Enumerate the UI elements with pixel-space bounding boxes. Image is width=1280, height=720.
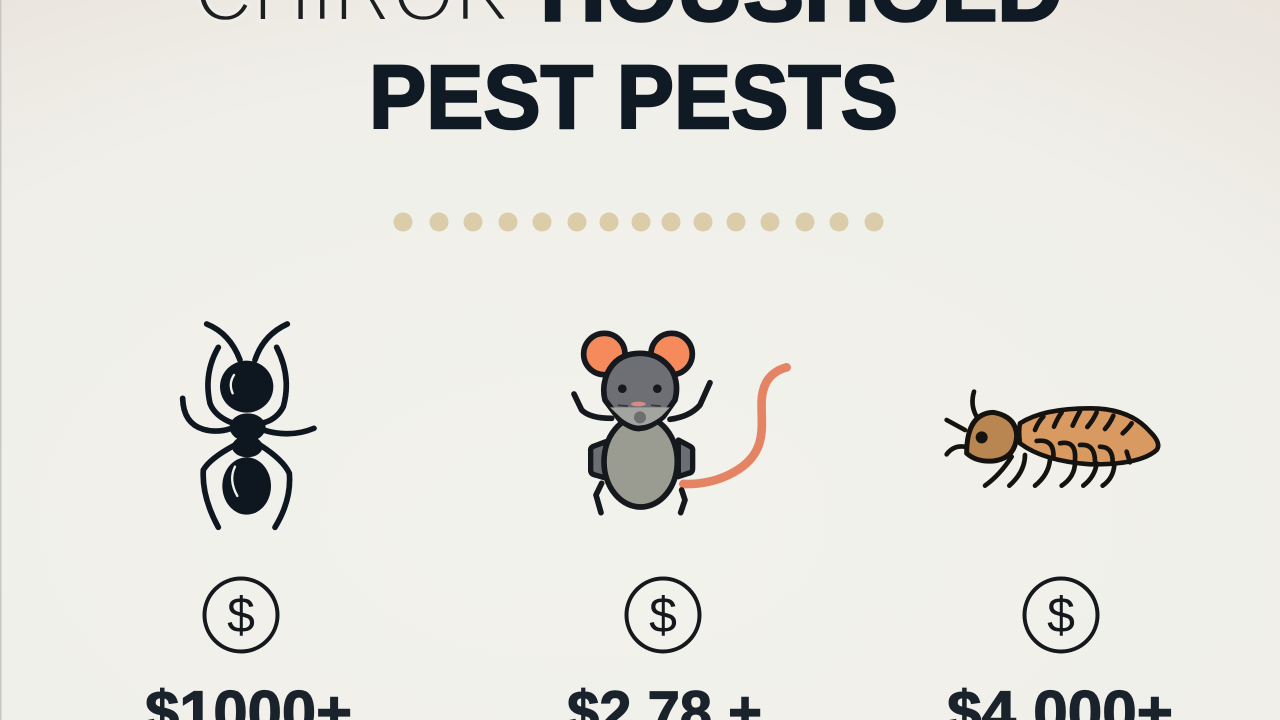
- icon: mouse: [574, 333, 787, 513]
- icon: larva bug: [947, 392, 1158, 486]
- dotted divider: [394, 212, 884, 232]
- icon: dollar coin 1: $: [227, 587, 255, 643]
- icon: dollar coin 3: [1024, 578, 1098, 652]
- icon: dollar coin 2: [626, 578, 700, 652]
- icon: ant: [183, 324, 314, 527]
- title: [194, 0, 1063, 148]
- icon: dollar coin 2: $: [649, 587, 677, 643]
- title line 2: PEST PESTS: [369, 48, 898, 148]
- icon: dollar coin 3: $: [1047, 587, 1075, 643]
- icon: dollar coin 1: [204, 578, 278, 652]
